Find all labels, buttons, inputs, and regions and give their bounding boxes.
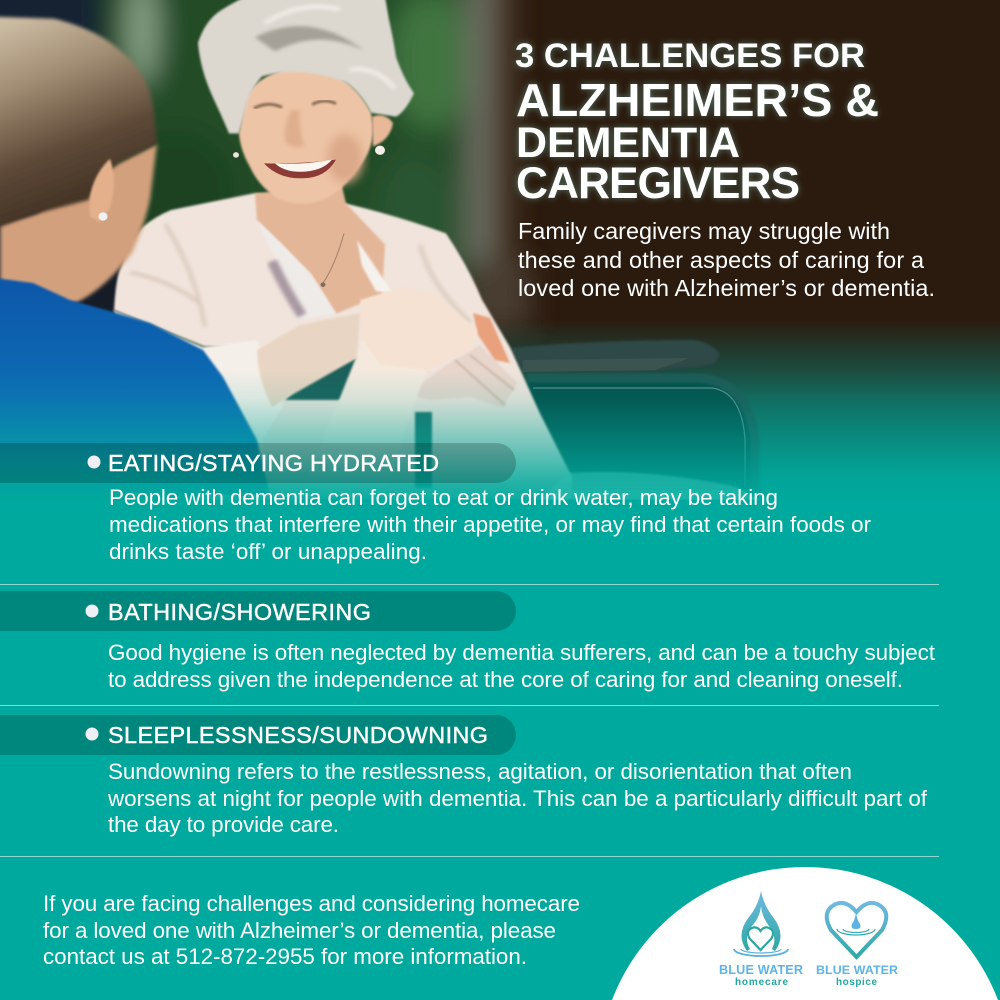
seat cushion: [540, 472, 760, 500]
clasped hands and forearms: [113, 287, 517, 500]
logo: Blue Water hospice: hospice: [836, 977, 877, 988]
logo: Blue Water homecare: BLUE WATER: [719, 963, 803, 977]
body text: drinks taste ‘off’ or unappealing.: [109, 539, 427, 564]
neck and chest: [255, 177, 385, 314]
woman's sleeve: [257, 313, 360, 407]
body text: [109, 485, 872, 564]
body text: to address given the independence at the core of caring for and cleaning oneself.: [108, 667, 903, 692]
caregiver hand: [360, 287, 477, 370]
intro text: loved one with Alzheimer’s or dementia.: [518, 275, 935, 301]
heading bar: [0, 443, 516, 483]
teal fade behind subjects: [0, 320, 1000, 510]
body text: Sundowning refers to the restlessness, agitation, or disorientation that often: [108, 759, 852, 784]
title: ALZHEIMER’S &: [516, 74, 879, 126]
contact call to action: contact us at 512-872-2955 for more information.: [43, 944, 527, 969]
title: 3 CHALLENGES FOR: [515, 37, 865, 75]
body text: [108, 640, 936, 692]
caregiver neck and face: [0, 144, 157, 303]
caregiver blue shirt: [0, 278, 270, 495]
intro text: these and other aspects of caring for a: [518, 247, 925, 273]
bench behind hands: [285, 356, 432, 488]
woman's lower hand: [407, 345, 517, 408]
teal lower background: [0, 500, 1000, 1000]
heading: SLEEPLESSNESS/SUNDOWNING: [108, 722, 488, 748]
logo: Blue Water hospice: BLUE WATER: [816, 963, 898, 977]
body text: Good hygiene is often neglected by dementia sufferers, and can be a touchy subject: [108, 640, 936, 665]
contact call to action: [43, 891, 580, 969]
logo: Blue Water homecare: [719, 891, 803, 988]
dark gap between figures: [66, 262, 128, 318]
body text: People with dementia can forget to eat or drink water, may be taking: [109, 485, 778, 510]
white logo circle: [612, 867, 998, 1000]
logo: Blue Water homecare: homecare: [735, 977, 788, 988]
section: bathing and showering: [0, 591, 936, 692]
body text: medications that interfere with their appetite, or may find that certain foods or: [109, 512, 872, 537]
bullet: [86, 604, 98, 618]
title: CAREGIVERS: [516, 159, 800, 208]
intro text: [518, 218, 935, 301]
body text: [107, 759, 928, 837]
contact call to action: If you are facing challenges and considering homecare: [43, 891, 580, 916]
background photo: caregiver holding senior woman's hands: [0, 0, 1000, 520]
caregiver forearm: [298, 340, 427, 495]
bullet: [86, 728, 98, 740]
teal fade over subjects: [0, 370, 1000, 510]
caregiver hair: [0, 17, 157, 227]
section: eating and hydration: [0, 443, 872, 564]
heading: BATHING/SHOWERING: [108, 599, 371, 625]
heading bar: [0, 591, 516, 631]
bullet: [88, 456, 100, 468]
heading bar: [0, 715, 516, 755]
contact call to action: for a loved one with Alzheimer’s or dementia, please: [43, 918, 556, 943]
logo: Blue Water hospice: [816, 903, 898, 988]
caregiver ear and earring: [89, 159, 114, 222]
senior woman head and hair: [198, 0, 414, 203]
necklace: [322, 233, 344, 285]
heading: EATING/STAYING HYDRATED: [108, 450, 439, 476]
caregiver sleeve: [113, 310, 283, 500]
body text: the day to provide care.: [108, 812, 339, 837]
body text: worsens at night for people with dementia. This can be a particularly difficult part of: [107, 786, 928, 811]
intro text: Family caregivers may struggle with: [518, 218, 890, 244]
section: sleeplessness and sundowning: [0, 715, 928, 837]
title: [515, 37, 879, 208]
orange fingertips: [473, 313, 510, 363]
senior woman cardigan: [114, 177, 572, 499]
title: DEMENTIA: [516, 119, 740, 167]
wheelchair: [510, 340, 757, 490]
lace blouse: [257, 220, 336, 320]
